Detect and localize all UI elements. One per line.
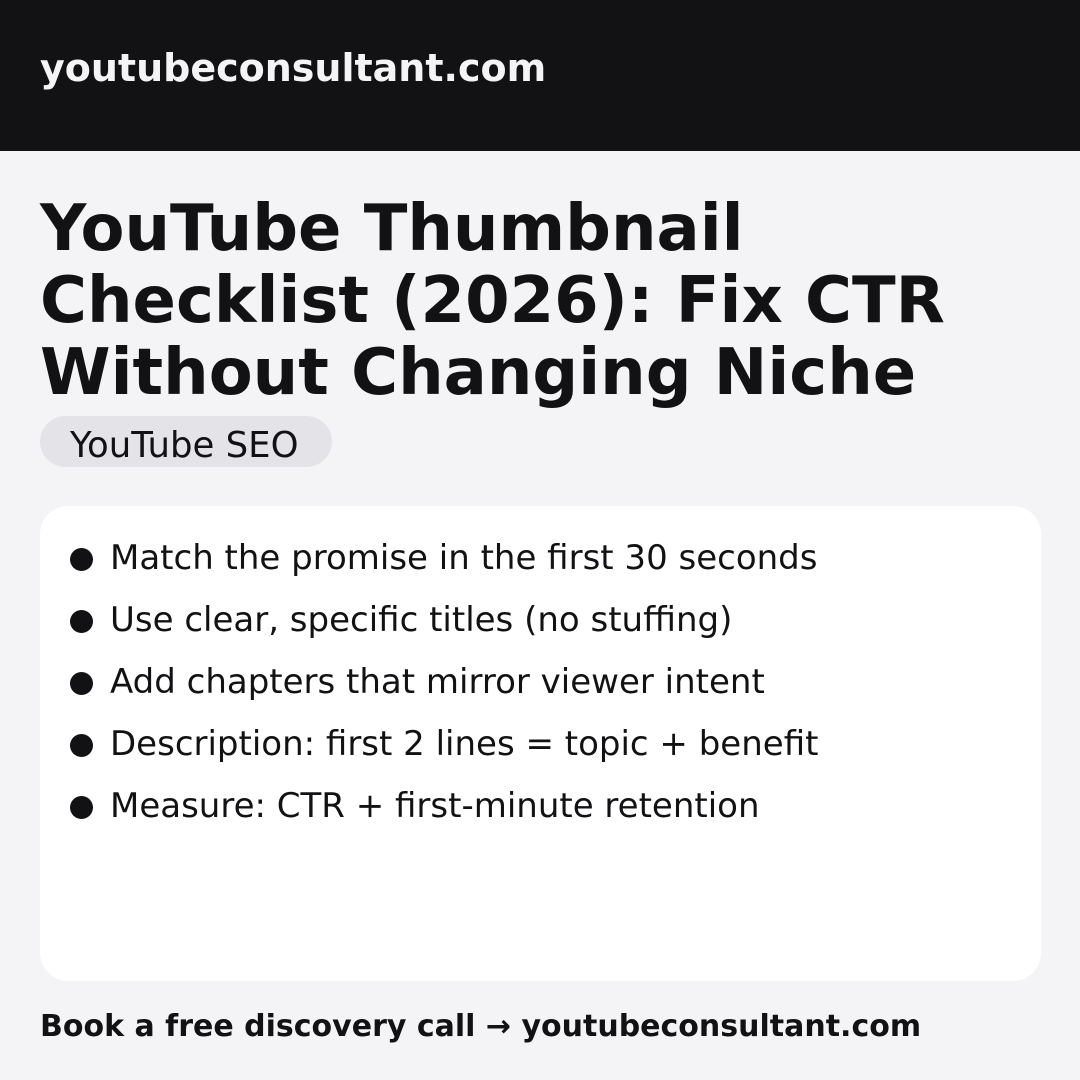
category tag: YouTube SEO [70, 425, 299, 466]
item 4 [70, 724, 818, 764]
item 3 [70, 662, 765, 702]
panel: checklist: Description: first 2 lines = topic + benefit [110, 724, 818, 764]
item 5 [70, 786, 760, 826]
panel: checklist: Match the promise in the first 30 seconds [110, 538, 817, 578]
title [39, 192, 945, 410]
category tag [40, 416, 332, 467]
title: Checklist (2026): Fix CTR [40, 264, 945, 338]
footer call to action: Book a free discovery call → youtubeconsultant.com [40, 1009, 921, 1044]
header bar [0, 0, 1080, 151]
panel: checklist: Measure: CTR + first-minute retention [110, 786, 760, 826]
panel: checklist: Use clear, specific titles (no stuffing) [110, 600, 732, 640]
item 2 [70, 600, 732, 640]
brand name: youtubeconsultant.com [40, 46, 546, 90]
title: Without Changing Niche [40, 336, 916, 410]
title: YouTube Thumbnail [40, 192, 744, 266]
item 1 [70, 538, 817, 578]
panel: checklist [40, 506, 1041, 981]
panel: checklist: Add chapters that mirror viewer intent [110, 662, 765, 702]
